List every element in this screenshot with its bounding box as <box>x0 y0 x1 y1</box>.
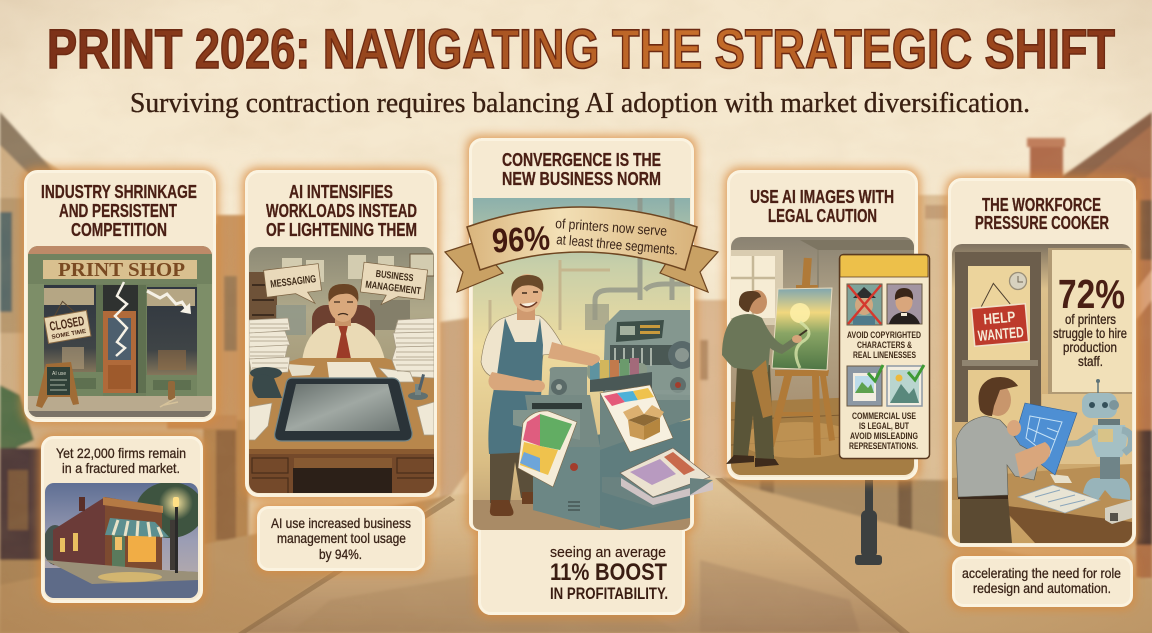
thumbnail: real likeness <box>887 284 922 324</box>
speech bubble: business management: BUSINESS <box>375 269 414 284</box>
heading: LEGAL CAUTION <box>768 206 877 226</box>
closed sign: CLOSED <box>48 313 85 334</box>
tablet <box>275 378 412 441</box>
speech bubble: messaging: MESSAGING <box>270 273 317 291</box>
press machine <box>513 310 696 530</box>
box on desk <box>1105 500 1132 524</box>
panel: firms remaining <box>39 434 205 605</box>
sign: help wanted <box>969 281 1029 346</box>
heading: NEW BUSINESS NORM <box>502 169 661 189</box>
banner: ribbon with stat: of printers now serve <box>555 215 668 239</box>
panel: industry shrinkage <box>22 168 218 424</box>
illustration: hiring and automation <box>952 244 1132 543</box>
rule text: AVOID COPYRIGHTED <box>847 330 921 341</box>
illustration: painter at easel <box>731 237 914 475</box>
desk <box>952 464 1132 543</box>
illustration: lit storefront at dusk <box>43 482 204 598</box>
illustration: closed print shop <box>28 246 212 417</box>
man with blueprint <box>956 377 1050 543</box>
sign: help wanted: HELP <box>983 309 1016 328</box>
profit stat: 11% BOOST <box>550 559 667 586</box>
banner: ribbon with stat <box>445 207 718 292</box>
illustration: printer at press <box>473 197 696 530</box>
panel: AI stat caption: by 94%. <box>319 546 362 562</box>
worried man <box>302 284 384 358</box>
pen holder <box>408 374 428 400</box>
panel: AI stat caption <box>255 504 427 573</box>
stat: 72 percent: of printers <box>1065 311 1116 327</box>
thumbnail: approved image two <box>887 366 922 406</box>
icon: lamp post <box>855 480 882 565</box>
rule text: REAL LINENESSES <box>853 350 916 361</box>
heading <box>266 182 417 240</box>
rule text: COMMERCIAL USE <box>852 411 916 422</box>
heading: COMPETITION <box>71 220 167 240</box>
panel: automation caption: accelerating the need for role <box>962 565 1121 581</box>
closed sign <box>42 298 91 343</box>
banner: ribbon with stat: 96% <box>491 219 551 260</box>
panel: AI stat caption: management tool usage <box>277 530 406 546</box>
heading: INDUSTRY SHRINKAGE <box>41 182 197 202</box>
sign: help wanted: WANTED <box>977 324 1025 345</box>
heading: USE AI IMAGES WITH <box>750 187 894 207</box>
panel: automation caption: redesign and automation. <box>973 580 1111 596</box>
door <box>103 311 136 393</box>
panel: workforce pressure cooker <box>946 176 1138 549</box>
trend arrow: down <box>147 291 191 314</box>
rule text: REPRESENTATIONS. <box>849 441 918 452</box>
speech bubble: messaging <box>264 264 323 309</box>
panel: AI stat caption: AI use increased business <box>271 515 411 531</box>
paper stacks <box>249 318 434 440</box>
thumbnail: approved image one <box>847 366 882 406</box>
caption: in a fractured market. <box>62 460 180 476</box>
banner: ribbon with stat: at least three segments. <box>556 231 679 258</box>
crack line <box>115 282 127 356</box>
panel: automation caption <box>950 554 1135 609</box>
profit stat: seeing an average <box>550 544 666 561</box>
painter <box>722 290 807 467</box>
telephone <box>250 367 282 398</box>
window panel <box>1048 248 1132 396</box>
closed sign: SOME TIME <box>51 329 87 341</box>
rule text: IS LEGAL, BUT <box>859 421 909 432</box>
clock <box>1010 272 1026 290</box>
heading <box>975 195 1109 233</box>
speech bubble: business management <box>359 262 428 310</box>
profit stat <box>550 544 668 603</box>
subtitle: Surviving contraction requires balancing AI adoption with market diversification. <box>130 88 1030 119</box>
stat: 72 percent: production <box>1063 339 1117 355</box>
panel: AI intensifies workloads <box>243 168 439 499</box>
chalkboard <box>36 362 79 408</box>
thumbnail: copyrighted character crossed out <box>847 284 882 325</box>
panel: AI images legal caution <box>722 168 930 482</box>
printer's arms <box>488 342 600 392</box>
stat: 72 percent: struggle to hire <box>1053 325 1127 341</box>
stat: 72 percent <box>1053 271 1127 369</box>
rule text: CHARACTERS & <box>857 340 912 351</box>
heading <box>750 187 894 226</box>
stat: 72 percent: staff. <box>1078 353 1103 369</box>
heading: AI INTENSIFIES <box>289 182 393 202</box>
door <box>955 252 1041 440</box>
heading: WORKLOADS INSTEAD <box>266 201 417 221</box>
painting <box>772 288 832 370</box>
caption: Yet 22,000 firms remain <box>56 445 186 461</box>
rule text <box>847 330 921 361</box>
right printed sheet <box>600 385 673 452</box>
stat: 72 percent: 72% <box>1058 271 1125 317</box>
heading <box>41 182 197 240</box>
icon: box <box>623 405 664 440</box>
chair <box>312 305 375 337</box>
heading: THE WORKFORCE <box>982 195 1101 215</box>
profit stat: IN PROFITABILITY. <box>550 584 668 603</box>
heading: CONVERGENCE IS THE <box>502 150 661 170</box>
magazine stack <box>620 448 713 505</box>
heading: OF LIGHTENING THEM <box>266 220 417 240</box>
panel: convergence <box>445 136 718 617</box>
rule text: AVOID MISLEADING <box>850 431 918 442</box>
awning <box>105 518 169 537</box>
speech bubble: business management: MANAGEMENT <box>365 280 422 297</box>
window <box>731 250 783 325</box>
rule text <box>849 411 918 452</box>
caption <box>56 445 186 476</box>
chalkboard: AI use <box>52 371 66 377</box>
green check marks <box>868 365 924 381</box>
heading <box>502 150 661 189</box>
heading: AND PERSISTENT <box>59 201 177 221</box>
callout: usage rules card <box>840 254 930 458</box>
desk <box>249 358 434 452</box>
illustration: overworked manager at desk <box>249 247 434 493</box>
robot <box>1066 379 1131 500</box>
blueprint <box>1013 403 1077 475</box>
left printed sheet <box>518 411 577 487</box>
printer <box>481 274 566 516</box>
shop sign: PRINT SHOP <box>58 259 185 281</box>
easel <box>767 258 835 455</box>
